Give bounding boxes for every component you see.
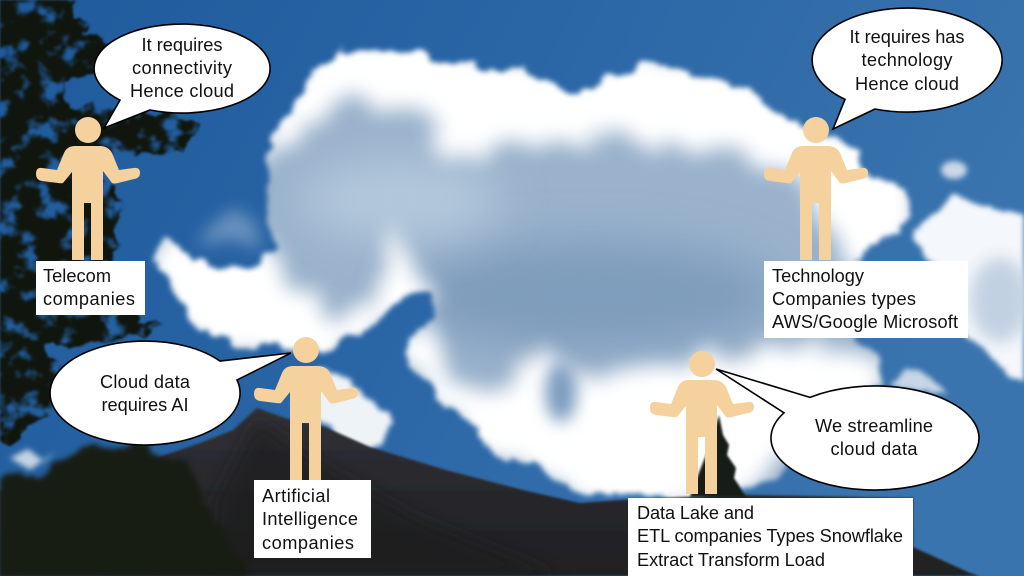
- figure body: [254, 366, 358, 480]
- label box: artificial intelligence companies: Intelligence: [262, 509, 358, 529]
- label box: artificial intelligence companies: Artificial: [262, 486, 330, 506]
- background: small tree behind fourth person: [690, 415, 746, 497]
- background: mountains: [0, 408, 980, 576]
- top white band: [264, 46, 913, 261]
- speech bubble: data lake: [716, 369, 979, 490]
- speech bubble: technology: It requires has: [850, 27, 964, 47]
- speech bubble: telecom: connectivity: [132, 58, 233, 78]
- background: main cloud: [140, 30, 930, 510]
- figure body: [650, 380, 754, 494]
- label box: data lake and ETL companies: ETL companies Types Snowflake: [637, 526, 903, 546]
- label box: technology companies: AWS/Google Microsoft: [772, 312, 958, 332]
- figure: telecom companies: [36, 117, 140, 260]
- label box: artificial intelligence companies: companies: [262, 533, 354, 553]
- figure body: [764, 146, 868, 260]
- label box: telecom companies: Telecom: [43, 266, 111, 286]
- background: tree lower left: [0, 445, 250, 576]
- label box: technology companies: [764, 261, 968, 338]
- lower left white band: [145, 225, 440, 365]
- figure head: [803, 117, 829, 143]
- figure: artificial intelligence companies: [254, 337, 358, 480]
- speech bubble: technology: Hence cloud: [855, 74, 959, 94]
- speech bubble: telecom: [94, 24, 270, 128]
- figure head: [293, 337, 319, 363]
- speech bubble: data lake: cloud data: [830, 439, 918, 459]
- speech bubble: artificial intelligence: Cloud data: [100, 372, 191, 392]
- figure: technology companies: [764, 117, 868, 260]
- label box: telecom companies: companies: [43, 289, 135, 309]
- label box: technology companies: Companies types: [772, 289, 916, 309]
- speech bubble: telecom: Hence cloud: [130, 81, 234, 101]
- figure: data lake and ETL companies: [650, 351, 754, 494]
- speech bubble: artificial intelligence: requires AI: [102, 395, 188, 415]
- speech bubble: artificial intelligence: [50, 341, 291, 445]
- speech bubble: data lake: We streamline: [815, 416, 933, 436]
- label box: data lake and ETL companies: [628, 498, 913, 576]
- label box: telecom companies: [36, 261, 145, 315]
- speech bubble: technology: technology: [862, 50, 953, 70]
- speech bubble: technology: [812, 8, 1002, 129]
- lower right white band: [395, 320, 900, 510]
- speech bubble: telecom: It requires: [142, 35, 222, 55]
- figure head: [689, 351, 715, 377]
- label box: data lake and ETL companies: Extract Transform Load: [637, 550, 825, 570]
- label box: technology companies: Technology: [772, 266, 865, 286]
- label box: data lake and ETL companies: Data Lake and: [637, 503, 754, 523]
- figure head: [75, 117, 101, 143]
- label box: artificial intelligence companies: [254, 480, 371, 558]
- background: side clouds: [10, 161, 1024, 470]
- background: tree upper left: [0, 0, 200, 440]
- figure body: [36, 146, 140, 260]
